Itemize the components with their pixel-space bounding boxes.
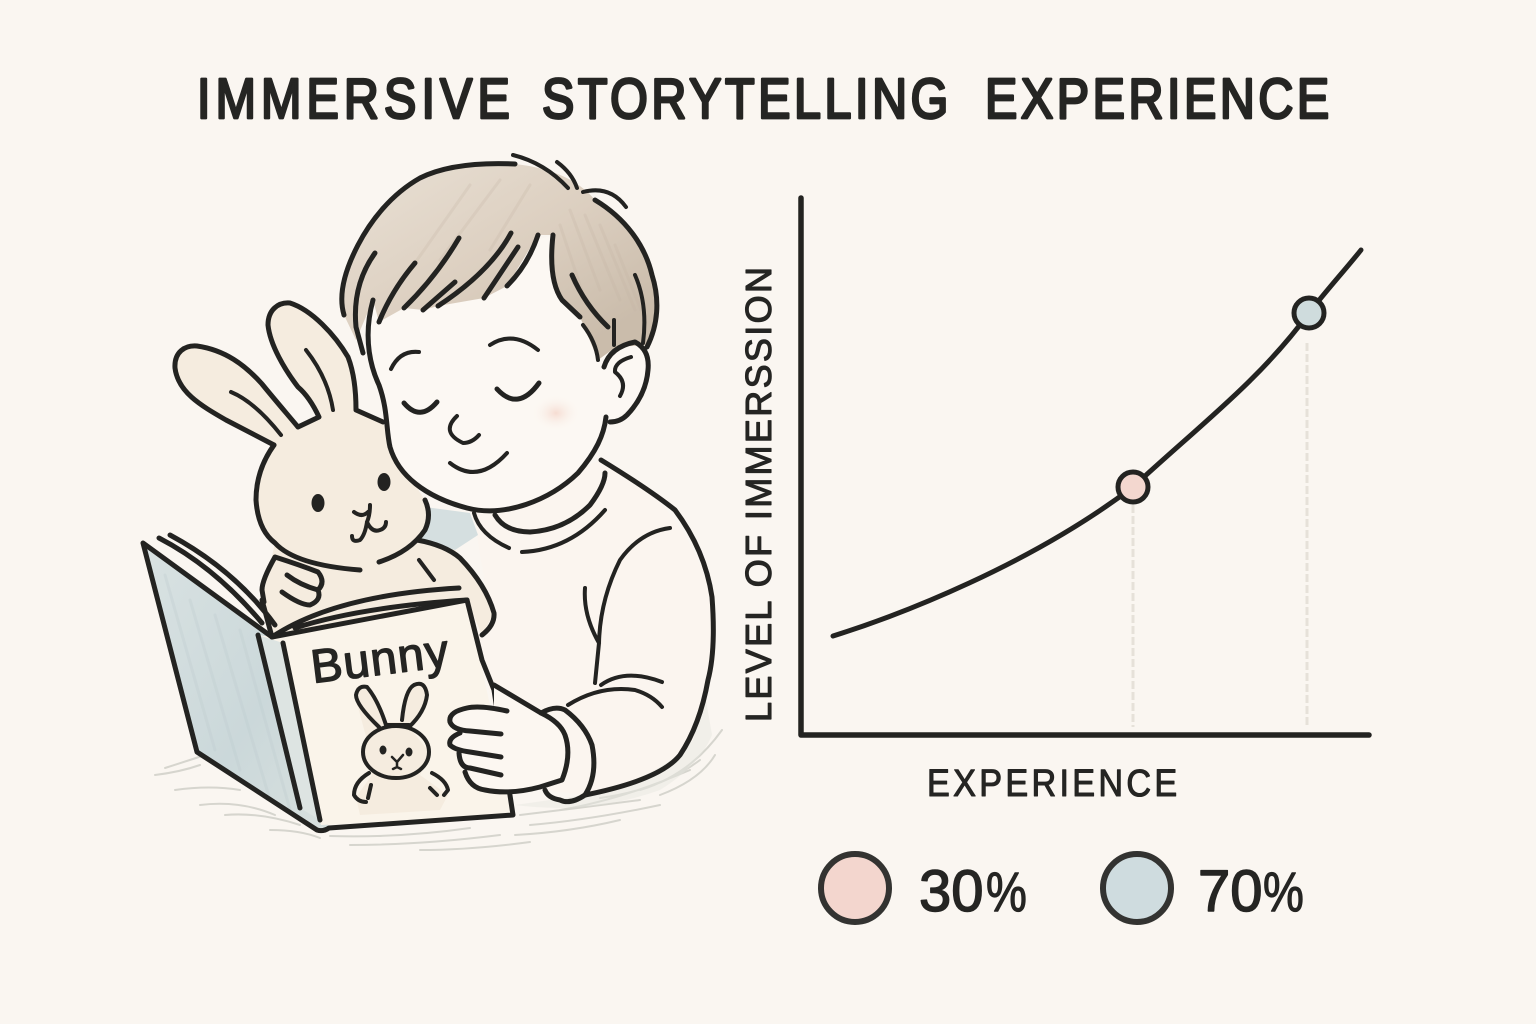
legend value 70%: 70	[1198, 859, 1263, 924]
child head fill	[370, 235, 648, 512]
line chart	[801, 198, 1369, 735]
hair pencil hatching	[410, 180, 645, 320]
hair lines	[342, 155, 657, 360]
bunny eyes	[312, 494, 324, 512]
title	[197, 67, 1329, 131]
eyebrows	[391, 339, 538, 369]
cover bunny	[354, 683, 448, 815]
closed eyes	[404, 383, 539, 412]
legend swatch pink	[821, 854, 889, 922]
drop guide lines	[1133, 343, 1307, 727]
marker: 70% point	[1294, 298, 1324, 328]
bunny paw	[262, 557, 322, 605]
legend value 70%: %	[1263, 861, 1304, 923]
x axis label: EXPERIENCE	[927, 761, 1177, 804]
illustration: child reading with bunny	[143, 155, 722, 850]
bunny fill	[175, 303, 494, 637]
legend value 30%: %	[986, 861, 1027, 923]
ear	[604, 342, 648, 422]
legend value 30%	[919, 859, 1027, 924]
cover hatching	[165, 575, 290, 810]
book	[143, 535, 514, 831]
axes	[801, 198, 1369, 735]
legend value 30%: 30	[919, 859, 984, 924]
legend swatch blue	[1103, 854, 1171, 922]
pencil ground shadow	[155, 700, 722, 850]
bunny body	[417, 540, 494, 635]
title: IMMERSIVE	[197, 67, 510, 131]
title: STORYTELLING	[542, 67, 948, 131]
bunny nose and mouth	[352, 505, 386, 541]
front cover	[258, 600, 514, 825]
growth curve	[833, 250, 1361, 636]
sweater fill	[467, 460, 712, 795]
child hand holding book	[450, 685, 594, 802]
back cover	[143, 543, 329, 830]
marker: 30% point	[1118, 472, 1148, 502]
blush	[532, 395, 580, 431]
sweater lines	[474, 460, 713, 795]
legend	[821, 854, 1304, 924]
nose and smile	[450, 416, 507, 472]
title: EXPERIENCE	[985, 67, 1329, 131]
bunny outline	[175, 303, 494, 635]
book title: Bunny	[308, 623, 452, 693]
hair fill	[342, 164, 658, 360]
face outline	[368, 300, 606, 511]
y axis label: LEVEL OF IMMERSSION	[738, 267, 779, 722]
blue background patch	[417, 507, 478, 550]
legend value 70%	[1198, 859, 1304, 924]
